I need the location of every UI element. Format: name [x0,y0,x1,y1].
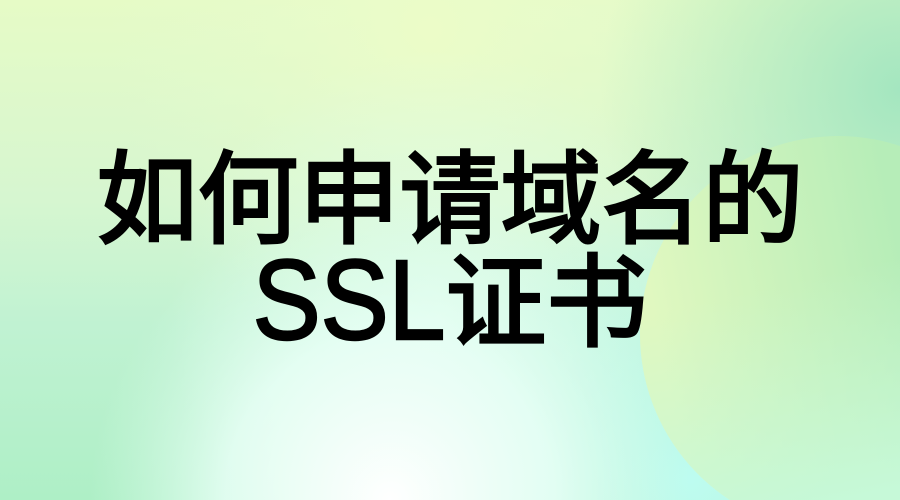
title line 2: SSL [253,237,445,363]
title line 2: 证书 [445,248,647,360]
title line 2 [253,237,647,363]
title line 1: 如何申请域名的 [96,145,804,257]
